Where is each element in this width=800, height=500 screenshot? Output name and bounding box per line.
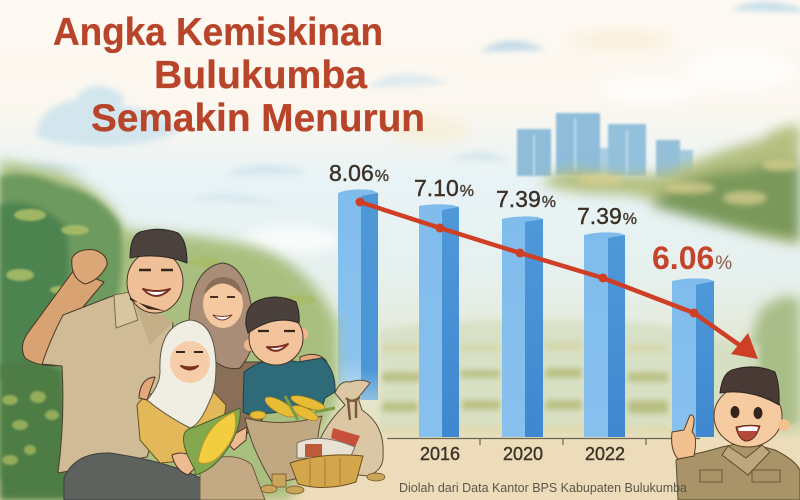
year label 2022: 2022	[585, 444, 625, 464]
trousers	[64, 453, 202, 500]
boy	[243, 297, 335, 415]
woman	[188, 263, 327, 440]
bar 2014	[338, 189, 378, 400]
value label 7.10%: 7.10%	[414, 175, 474, 201]
thumb hand	[672, 415, 696, 459]
family illustration	[22, 229, 385, 500]
man	[22, 229, 202, 500]
corn cob held by girl	[184, 408, 240, 475]
raised arm and fist	[22, 270, 104, 366]
tied burlap sack	[310, 380, 383, 476]
face	[127, 251, 183, 313]
title	[53, 11, 425, 140]
value label 7.39% second: 7.39%	[577, 203, 637, 229]
bar 2020	[502, 216, 543, 437]
value label 7.39% first: 7.39%	[496, 186, 556, 212]
source note: Diolah dari Data Kantor BPS Kabupaten Bulukumba	[399, 480, 688, 495]
background trees right	[540, 125, 800, 430]
hands	[172, 453, 198, 475]
cap	[130, 229, 187, 263]
value label 8.06%: 8.06%	[329, 160, 389, 186]
bar chart	[329, 160, 758, 464]
background clouds	[8, 2, 800, 205]
girl	[137, 320, 265, 500]
boy with thumbs up	[672, 367, 800, 500]
cap	[720, 367, 779, 405]
year label 2016: 2016	[420, 444, 460, 464]
ground	[290, 438, 800, 500]
background fields	[380, 320, 800, 435]
face	[714, 385, 782, 447]
girl dress lower	[200, 457, 265, 500]
axis line	[387, 438, 700, 445]
foliage left	[0, 160, 338, 500]
title: Bulukumba	[154, 54, 367, 97]
city skyline	[517, 113, 693, 178]
shirt	[42, 295, 173, 473]
bar 2024	[672, 278, 714, 437]
sack of corn	[245, 393, 335, 482]
bar 2016	[419, 204, 459, 437]
year label 2020: 2020	[503, 444, 543, 464]
trend line arrow	[356, 198, 758, 359]
title: Semakin Menurun	[91, 97, 425, 140]
uniform shirt	[676, 442, 800, 500]
value label 6.06%: 6.06%	[652, 240, 732, 276]
title: Angka Kemiskinan	[53, 11, 383, 54]
bar 2022	[584, 232, 625, 437]
basket of goods	[261, 438, 385, 494]
